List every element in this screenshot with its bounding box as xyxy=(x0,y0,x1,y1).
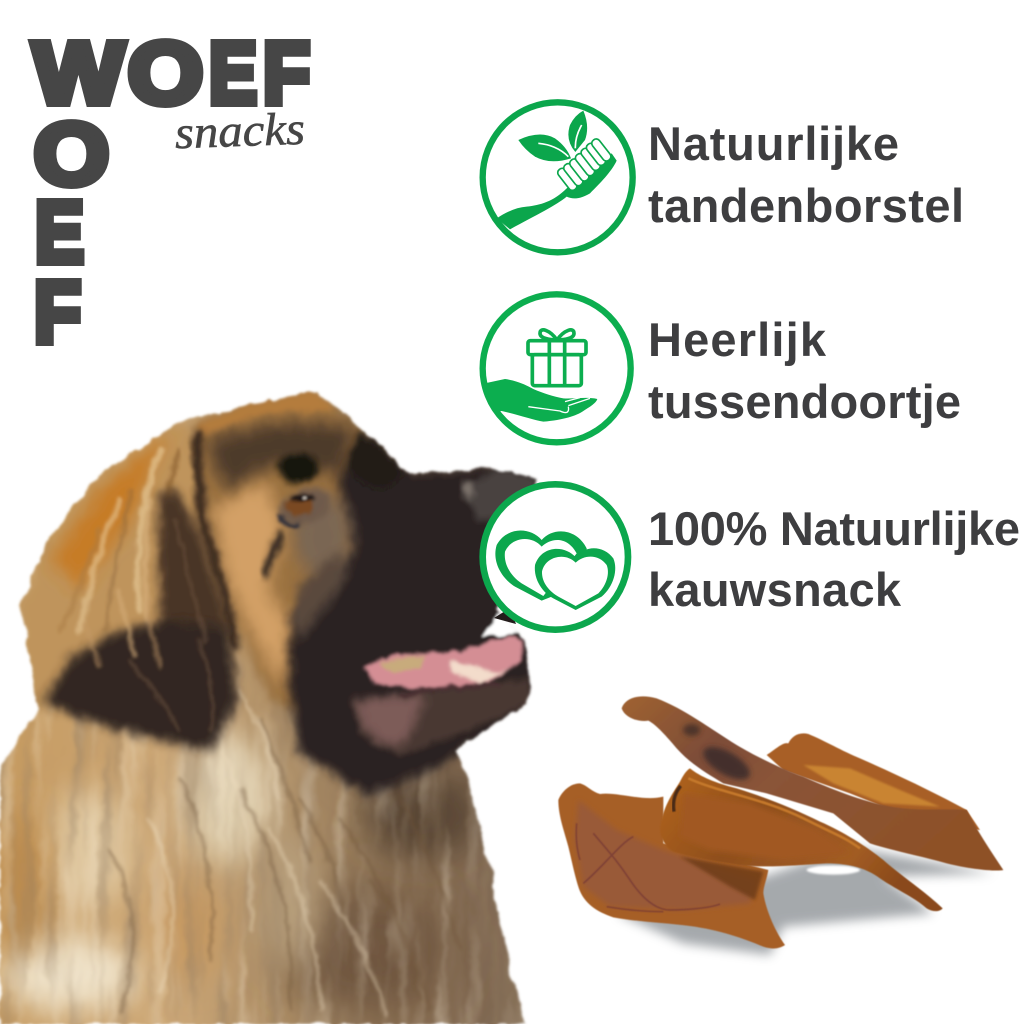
brush handle xyxy=(497,153,617,229)
text: natural chew xyxy=(648,502,1020,616)
text: natural toothbrush: tandenborstel xyxy=(648,179,964,232)
icon: gift on hand xyxy=(480,294,631,442)
dog xyxy=(0,390,538,1024)
highlight in shadow xyxy=(807,865,860,875)
dark lip line xyxy=(400,685,500,695)
hand xyxy=(480,379,597,422)
text: delicious snack: tussendoortje xyxy=(648,375,961,428)
text: natural toothbrush xyxy=(648,117,964,232)
left ear xyxy=(558,783,785,948)
logo: Woef snacks: W xyxy=(33,25,125,122)
logo: Woef snacks: E xyxy=(35,184,84,281)
dark inner shadow xyxy=(680,857,763,900)
dog body and neck xyxy=(0,380,560,1024)
cheek transition xyxy=(290,550,345,640)
nostril shadow xyxy=(494,608,516,624)
text: natural toothbrush: Natuurlijke xyxy=(648,117,899,170)
chews xyxy=(558,696,1003,955)
back ear xyxy=(767,733,980,830)
nose highlight xyxy=(462,481,474,499)
dark ear upper xyxy=(158,490,232,640)
front ear rim xyxy=(688,778,860,848)
text: natural chew: kauwsnack xyxy=(648,563,902,616)
dark ear xyxy=(42,620,238,752)
forehead dark patch xyxy=(345,430,405,490)
left ear inner xyxy=(575,800,757,910)
brow spot xyxy=(278,453,318,483)
orange mane edge xyxy=(50,430,170,590)
chews shadow xyxy=(617,847,993,955)
logo: Woef snacks: O xyxy=(34,106,109,203)
veins xyxy=(576,823,720,912)
logo: Woef snacks: O xyxy=(128,25,203,122)
lower lip and jaw xyxy=(352,678,530,756)
gift box xyxy=(528,330,586,386)
chest colour patches xyxy=(0,735,480,1020)
eye surround xyxy=(294,493,350,577)
bristles xyxy=(556,137,613,192)
top orange tuft xyxy=(195,390,335,436)
sweeping fur strokes xyxy=(110,690,460,1015)
forehead dark shading xyxy=(205,422,355,490)
logo: Woef snacks xyxy=(33,25,310,361)
dark spots xyxy=(683,724,755,786)
logo: Woef snacks: snacks xyxy=(174,103,306,158)
eye xyxy=(264,482,335,577)
text: natural chew: 100% Natuurlijke xyxy=(648,502,1020,555)
text: delicious snack xyxy=(648,313,961,428)
head tan xyxy=(190,398,365,712)
upper tooth xyxy=(482,614,530,636)
ear streaks xyxy=(60,450,178,640)
front ear xyxy=(660,768,943,911)
front ear inner xyxy=(680,793,850,860)
white lip xyxy=(450,660,512,684)
logo: Woef snacks: F xyxy=(34,264,81,361)
front heart xyxy=(535,548,615,610)
long ear xyxy=(622,696,1003,871)
front ear fold xyxy=(674,786,681,812)
fur streak texture xyxy=(0,679,524,1024)
muzzle dark xyxy=(278,430,538,802)
back ear inner xyxy=(803,765,940,807)
logo: Woef snacks: E xyxy=(209,25,257,122)
lip pink patches xyxy=(355,695,425,750)
icon: toothbrush with leaves xyxy=(483,102,633,252)
left leaf xyxy=(518,135,571,161)
icon: hearts xyxy=(483,484,628,630)
back heart xyxy=(495,531,587,601)
tan cheek xyxy=(212,480,292,690)
nose top xyxy=(465,470,536,522)
dark seam beside ear xyxy=(197,430,236,650)
mouth and tongue xyxy=(362,635,523,695)
mane xyxy=(20,422,200,709)
teeth xyxy=(378,655,425,671)
ear fur overlap xyxy=(85,520,212,730)
text: delicious snack: Heerlijk xyxy=(648,313,827,366)
logo: Woef snacks: F xyxy=(263,25,310,122)
right leaf xyxy=(568,111,587,152)
